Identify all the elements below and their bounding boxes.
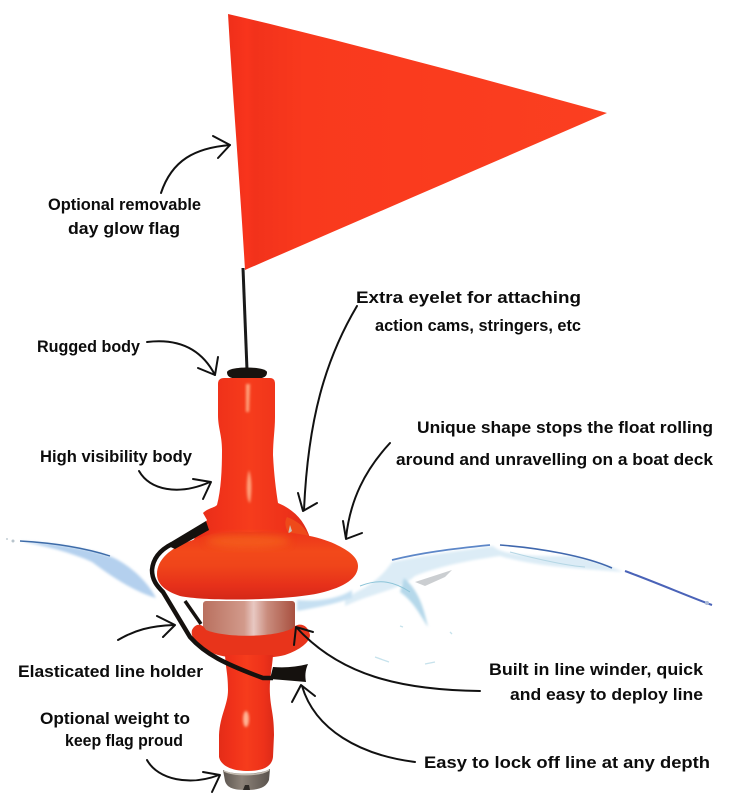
arrow: elasticated line holder [118, 616, 175, 640]
elastic line holder [152, 521, 308, 682]
lower handle [219, 655, 274, 771]
flag [228, 14, 607, 270]
right water wave [297, 545, 712, 664]
label: easy to lock off line: Easy to lock off line at any depth [424, 753, 710, 772]
arrow: high visibility body [139, 471, 211, 499]
label: built in line winder: Built in line winder, quick [489, 660, 704, 679]
arrow: unique shape [343, 443, 390, 539]
label: optional flag: day glow flag [68, 219, 180, 238]
arrow: extra eyelet [298, 306, 357, 511]
float product [152, 14, 607, 790]
disc glow [206, 534, 290, 548]
label: built in line winder [489, 660, 704, 704]
arrow: optional weight [147, 760, 220, 792]
label: optional weight: Optional weight to [40, 709, 190, 728]
label: unique shape [396, 418, 714, 469]
arrow: built in line winder [294, 627, 480, 691]
flag pole [243, 268, 247, 370]
lower flange [192, 625, 310, 658]
arrow: flag [161, 136, 230, 193]
label: high visibility body: High visibility body [40, 447, 193, 466]
line spool [203, 601, 295, 638]
line lock tab [270, 664, 308, 682]
label: rugged body: Rugged body [37, 337, 141, 356]
label: unique shape: Unique shape stops the float rolling [417, 418, 713, 437]
label: unique shape: around and unravelling on a boat deck [396, 450, 714, 469]
arrow: rugged body [147, 341, 218, 375]
handle highlight [243, 711, 249, 727]
label: extra eyelet: Extra eyelet for attaching [356, 288, 581, 307]
eyelet lug [285, 517, 310, 541]
disc [157, 532, 358, 600]
metal weight [223, 769, 270, 790]
label: extra eyelet: action cams, stringers, etc [375, 316, 581, 335]
label: optional weight [40, 709, 190, 750]
upper body [190, 378, 310, 560]
arrow: easy to lock off [292, 685, 415, 762]
body highlight [246, 384, 251, 503]
label: optional flag [48, 195, 201, 238]
label: elasticated line holder: Elasticated line holder [18, 662, 203, 681]
label: optional weight: keep flag proud [65, 731, 183, 750]
label: extra eyelet [356, 288, 581, 335]
black cap [227, 368, 267, 379]
water splash [6, 538, 712, 664]
label: built in line winder: and easy to deploy line [510, 685, 703, 704]
left water wave [6, 538, 156, 598]
label: optional flag: Optional removable [48, 195, 201, 214]
